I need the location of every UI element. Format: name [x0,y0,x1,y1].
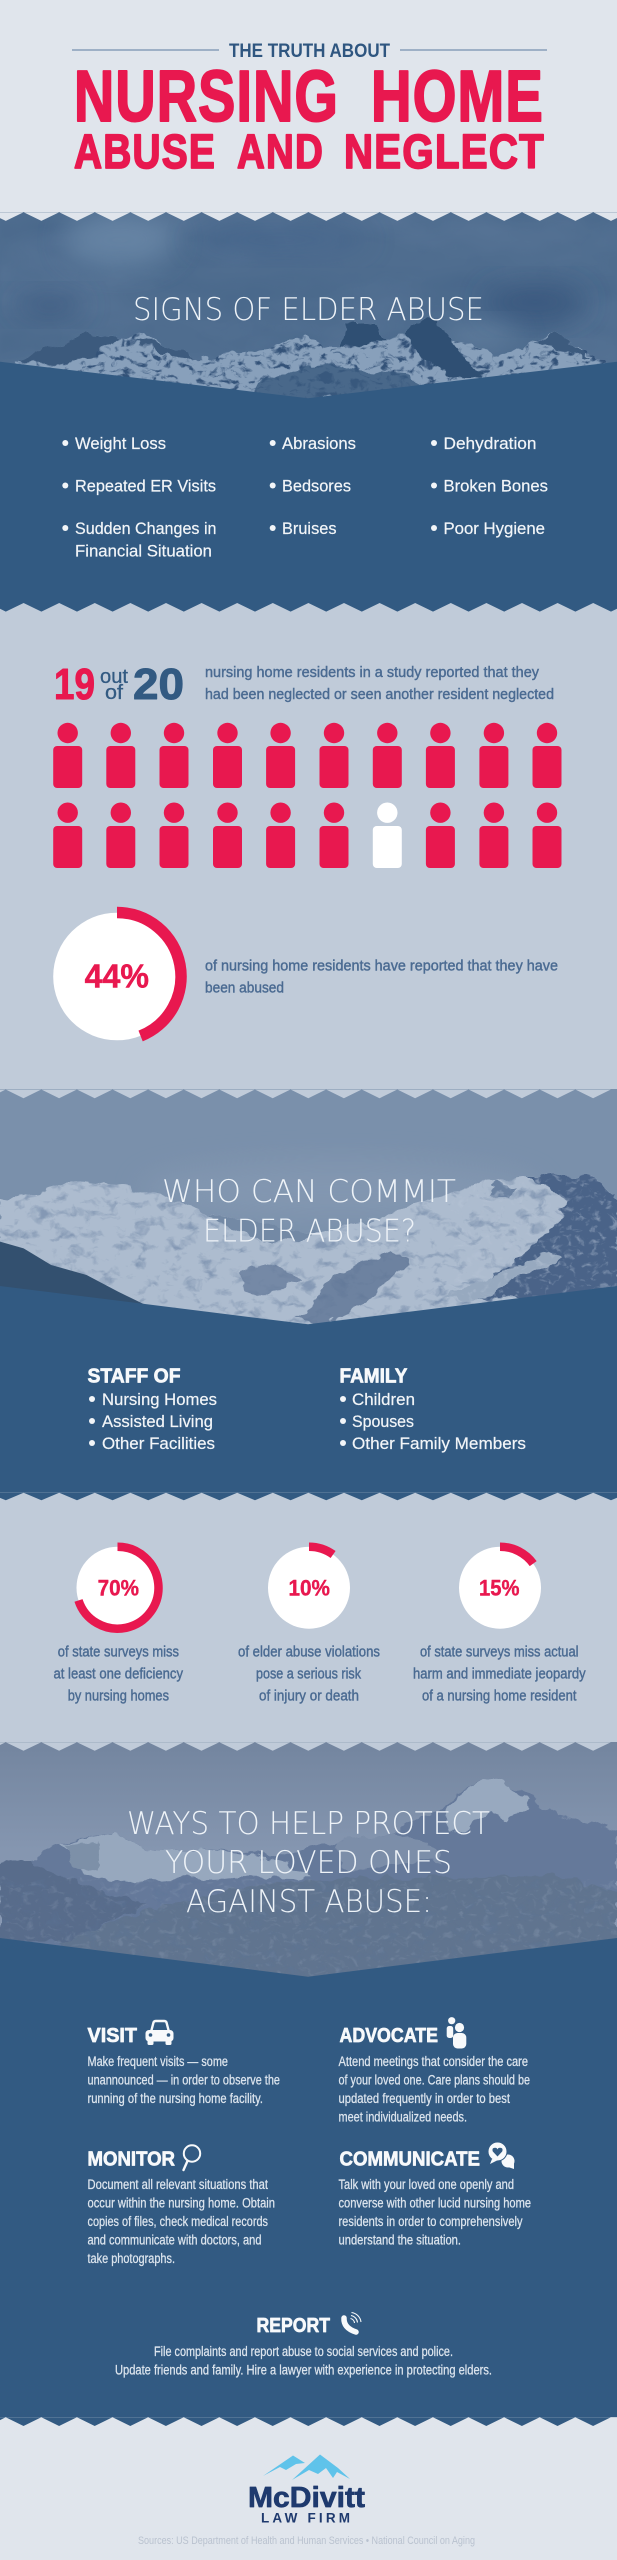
list: family [340,1366,526,1453]
block: monitor [88,2145,275,2266]
text: monitor: Document all relevant situations that [88,2177,268,2192]
text: monitor: and communicate with doctors, and [88,2232,262,2248]
logo: McDivitt Law Firm [248,2454,365,2526]
text: advocate [338,2054,530,2125]
sources line: Sources: US Department of Health and Human Services • National Council on Aging [138,2535,475,2547]
photo: rocky mountain peak [0,1742,617,1982]
donut chart: 70 percent: 70% [98,1576,139,1601]
list: family: Children [352,1390,415,1409]
caption: 15 percent [413,1645,586,1705]
heading: who can commit elder abuse: ELDER ABUSE? [203,1214,416,1250]
block: communicate: COMMUNICATE [340,2149,480,2171]
list: staff of: Nursing Homes [102,1390,217,1409]
stat heading: 19 out of 20: 19 [54,660,95,709]
blue body panel [0,1286,617,1493]
heading: ways to help protect: YOUR LOVED ONES [165,1845,452,1881]
text: visit: unannounced — in order to observe the [88,2073,280,2088]
text: communicate: residents in order to comprehensively [338,2214,523,2229]
list: signs column two: Bruises [282,519,336,538]
text: visit: running of the nursing home facility. [88,2091,263,2106]
text: communicate: Talk with your loved one openly and [338,2177,514,2192]
forest silhouette [0,1242,146,1305]
wave border: blue to surveys [0,1493,617,1500]
wave border: blue to stats [0,603,617,612]
caption: 10 percent: of injury or death [259,1689,359,1705]
panel: ways to help protect [0,1742,617,2417]
stat text: neglect: had been neglected or seen another resident neglected [205,687,554,703]
icon: people [447,2017,466,2048]
donut chart: 44 percent [53,912,181,1040]
text: monitor [88,2177,275,2266]
stat heading: 19 out of 20 [54,660,184,709]
list: family: Spouses [352,1412,414,1431]
caption: 15 percent: of a nursing home resident [422,1689,576,1705]
stat text: abused [205,959,558,996]
list: staff of: Assisted Living [102,1412,213,1431]
icon: magnifying glass [184,2145,200,2170]
title line one: NURSING [74,57,339,137]
title line two: ABUSE [74,126,216,179]
logo subtitle: LAW FIRM [261,2511,350,2526]
block: communicate [338,2142,531,2248]
title line two [74,126,545,179]
list: staff of: Other Facilities [102,1434,215,1453]
title line two: NEGLECT [344,126,545,179]
stat heading: 19 out of 20: 20 [133,660,184,709]
text: report: Update friends and family. Hire a lawyer with experience in protecting elders. [115,2363,492,2378]
list: signs column two [270,434,356,538]
text: communicate: understand the situation. [338,2232,461,2248]
icon: chat bubbles [488,2142,514,2169]
list: family: Other Family Members [352,1434,526,1453]
heading: who can commit elder abuse [162,1174,456,1250]
heading: ways to help protect [127,1806,490,1920]
caption: 70 percent: of state surveys miss [58,1645,179,1661]
title line two: AND [237,126,324,179]
text: communicate [338,2177,531,2248]
donut chart: 10 percent: 10% [288,1576,330,1601]
pictogram: 19 of 20 residents [53,723,561,868]
text: report [115,2344,492,2378]
list: signs column three: Dehydration [444,434,536,453]
text: communicate: converse with other lucid nursing home [338,2196,531,2210]
donut chart: 44 percent: 44% [85,958,149,995]
heading: the truth about: THE TRUTH ABOUT [229,41,390,62]
text: advocate: of your loved one. Care plans should be [338,2073,530,2088]
stat text: neglect [205,665,554,703]
heading: who can commit elder abuse: WHO CAN COMMIT [162,1174,456,1210]
block: advocate: ADVOCATE [340,2025,438,2047]
list: signs column one: Repeated ER Visits [75,476,216,496]
block: advocate [338,2017,530,2125]
stat text: abused: of nursing home residents have reported that they have [205,959,558,975]
block: visit [88,2021,280,2106]
donut chart: 15 percent: 15% [479,1576,520,1601]
wave border: surveys to photo [0,1742,611,1751]
list: staff of [88,1366,217,1453]
text: advocate: meet individualized needs. [338,2110,467,2125]
photo: snowy mountain valley [0,1089,617,1330]
page background: top header band [0,0,617,212]
stat text: neglect: nursing home residents in a study reported that they [205,665,540,681]
wave border: stats to photo [0,1090,611,1098]
stat heading: 19 out of 20: of [105,682,123,704]
donut chart: 15 percent [459,1547,541,1629]
donut chart: 10 percent [268,1547,350,1629]
list: signs column two: Abrasions [282,434,356,453]
block: report [115,2312,492,2378]
logo mountains [263,2454,350,2480]
icon: car [146,2021,174,2045]
list: signs column two: Bedsores [282,476,351,496]
text: monitor: occur within the nursing home. Obtain [88,2196,275,2210]
panel: header title [72,41,547,179]
caption: 15 percent: of state surveys miss actual [420,1645,578,1661]
blue body panel [0,362,617,603]
caption: 10 percent [238,1645,380,1705]
caption: 10 percent: of elder abuse violations [238,1645,380,1661]
block: report: REPORT [256,2315,330,2337]
list: family: FAMILY [340,1366,408,1388]
list: signs column three [431,434,548,538]
caption: 70 percent: by nursing homes [68,1689,169,1705]
block: monitor: MONITOR [88,2149,176,2171]
logo wordmark: McDivitt [248,2482,365,2514]
list: signs column one: Financial Situation [75,542,212,560]
list: signs column three: Poor Hygiene [444,519,545,538]
wave border: blue to footer [0,2417,611,2426]
panel: footer [0,2417,617,2560]
text: visit [88,2054,280,2106]
text: monitor: copies of files, check medical records [88,2214,268,2229]
text: monitor: take photographs. [88,2251,175,2266]
list: signs column one [62,434,216,560]
caption: 15 percent: harm and immediate jeopardy [413,1667,586,1683]
blue body panel [0,1938,617,2417]
list: signs column three: Broken Bones [444,476,548,496]
photo: cloudy mountain range [0,212,617,405]
list: staff of: STAFF OF [88,1366,180,1388]
panel: statistics on neglect and abuse [0,603,617,1090]
heading: ways to help protect: WAYS TO HELP PROTECT [127,1806,490,1842]
stat text: abused: been abused [205,980,284,996]
text: advocate: Attend meetings that consider the care [338,2054,528,2069]
caption: 70 percent: at least one deficiency [54,1667,184,1683]
icon: phone [344,2312,361,2332]
panel: survey statistics [0,1493,617,1743]
list: signs column one: Sudden Changes in [75,519,216,538]
donut chart: 70 percent [76,1547,158,1629]
list: signs column one: Weight Loss [75,434,166,453]
panel: signs of elder abuse [0,212,617,603]
text: visit: Make frequent visits — some [88,2054,228,2069]
block: visit: VISIT [88,2025,137,2047]
text: report: File complaints and report abuse to social services and police. [154,2344,453,2359]
caption: 70 percent [54,1645,184,1705]
title line one: HOME [371,57,544,137]
stat heading: 19 out of 20: out [100,666,128,688]
panel: who can commit elder abuse [0,1089,617,1493]
heading: signs of elder abuse: SIGNS OF ELDER ABUSE [133,292,484,328]
text: advocate: updated frequently in order to best [338,2091,510,2106]
heading: ways to help protect: AGAINST ABUSE: [186,1884,432,1920]
caption: 10 percent: pose a serious risk [256,1667,362,1683]
wave border: header to photo [0,212,617,221]
